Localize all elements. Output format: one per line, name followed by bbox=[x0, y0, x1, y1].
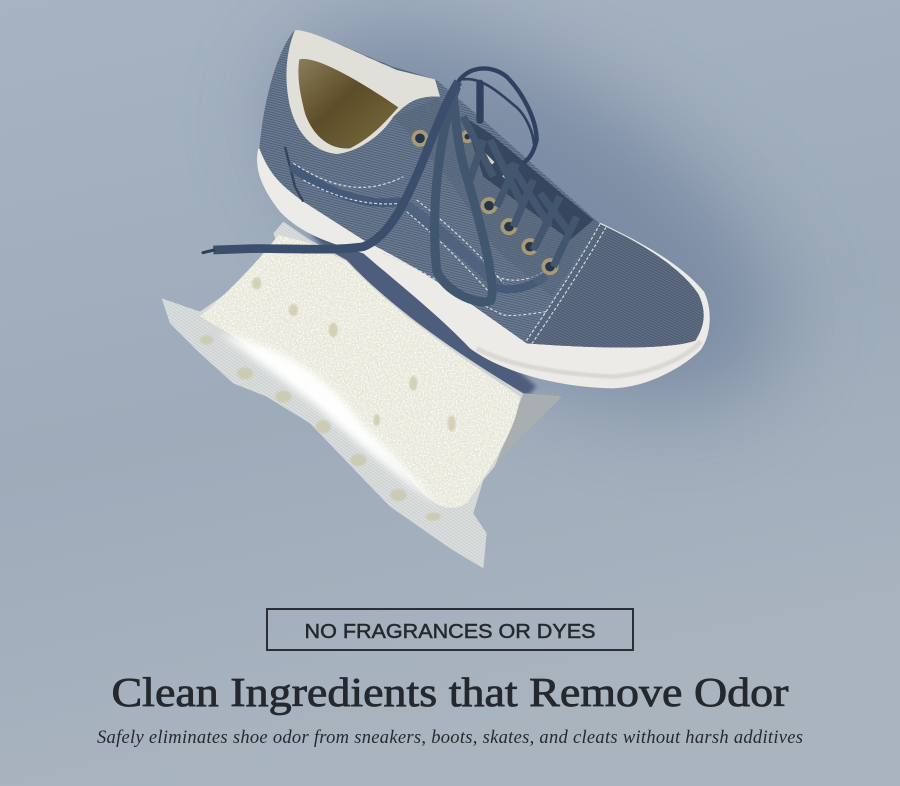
white collar bbox=[286, 30, 440, 154]
stitching bbox=[293, 163, 606, 344]
title: Clean Ingredients that Remove Odor bbox=[112, 669, 789, 715]
eyelets bbox=[413, 132, 557, 273]
shadow band under the shoe bbox=[310, 233, 537, 397]
white sole bbox=[257, 148, 710, 388]
lace bed bbox=[463, 117, 593, 240]
criss-cross laces bbox=[463, 117, 577, 267]
badge: no fragrances or dyes: NO FRAGRANCES OR DYES bbox=[304, 621, 596, 643]
translucent film bbox=[162, 222, 562, 568]
shoe interior bbox=[298, 59, 398, 148]
canvas upper bbox=[259, 30, 704, 347]
long lace loop bbox=[435, 87, 492, 302]
side stripes bbox=[293, 168, 543, 289]
loose lace end bbox=[213, 82, 458, 250]
printed marks bbox=[200, 277, 456, 521]
eyestay panel bbox=[393, 98, 600, 297]
sole wear band bbox=[477, 342, 701, 377]
bead body bbox=[200, 235, 520, 508]
upper lace loops bbox=[457, 68, 537, 162]
badge: no fragrances or dyes bbox=[267, 609, 633, 650]
toe cap canvas bbox=[527, 224, 704, 347]
heel seam bbox=[285, 147, 303, 202]
corner film bbox=[493, 393, 562, 470]
sneaker bbox=[203, 30, 710, 388]
subtitle: Safely eliminates shoe odor from sneakers, boots, skates, and cleats without harsh additives bbox=[97, 728, 803, 748]
sachet of odor-removing beads bbox=[162, 222, 562, 568]
bead grain bbox=[200, 235, 520, 508]
tongue slivers bbox=[483, 153, 537, 202]
aglet bbox=[203, 250, 214, 253]
bright highlight bbox=[220, 333, 440, 507]
